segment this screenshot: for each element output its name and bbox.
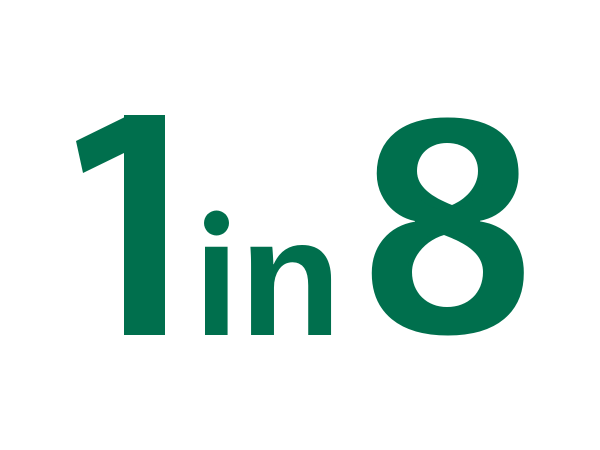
numeral 8: 8 bbox=[362, 54, 533, 398]
numeral 1: 1 bbox=[46, 45, 224, 403]
word: in: in bbox=[193, 185, 341, 371]
